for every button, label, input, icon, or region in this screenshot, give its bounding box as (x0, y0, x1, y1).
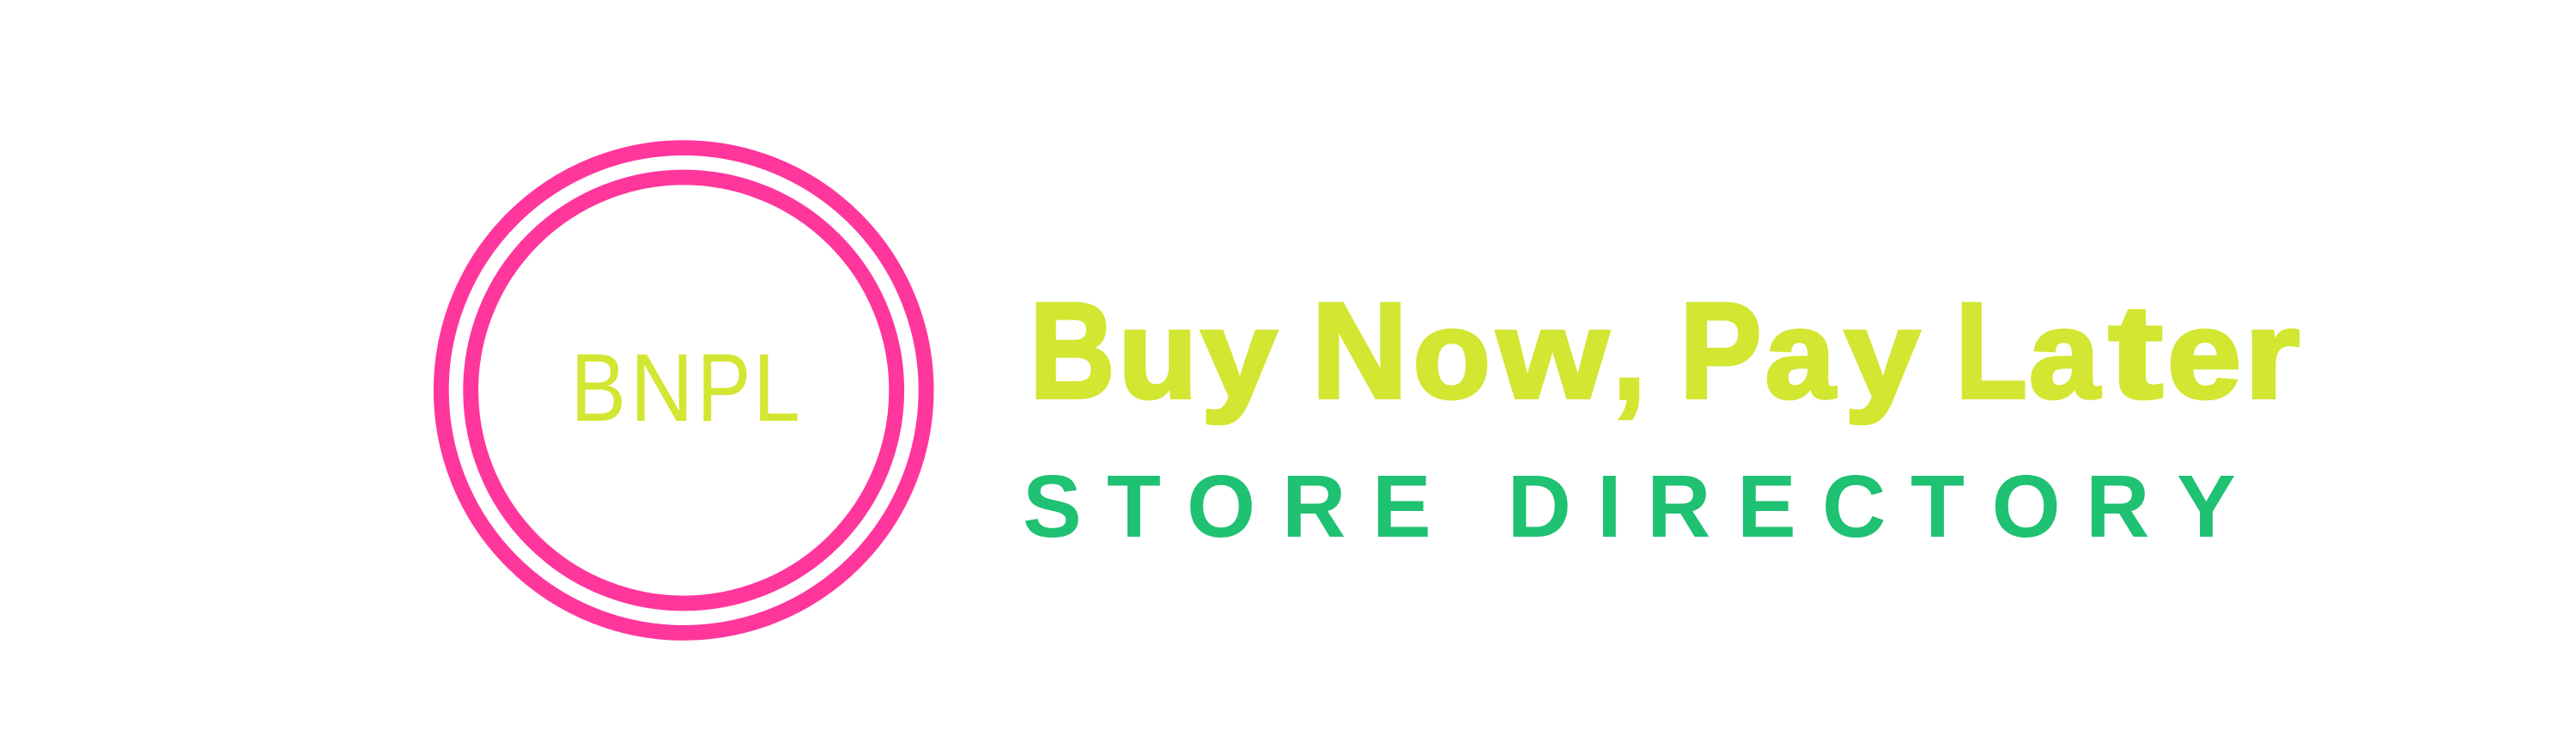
logo text: BNPL: B (570, 334, 626, 442)
inner ring (471, 177, 896, 603)
heading: Buy Now, Pay Later (1030, 274, 2300, 428)
logo text: BNPL: L (753, 335, 800, 441)
heading: Buy Now, Pay Later: a (1765, 285, 1837, 425)
heading: Buy Now, Pay Later: u (1118, 284, 1198, 424)
heading: Buy Now, Pay Later: e (2167, 284, 2241, 424)
heading: Buy Now, Pay Later: t (2108, 277, 2163, 426)
outer ring (441, 148, 927, 633)
heading: Buy Now, Pay Later: a (2029, 285, 2100, 425)
heading: Buy Now, Pay Later: w (1496, 285, 1609, 425)
heading: Buy Now, Pay Later: N (1311, 276, 1408, 427)
heading: Buy Now, Pay Later: L (1955, 276, 2027, 427)
logo text: BNPL: N (630, 334, 694, 441)
subheading: STORE DIRECTORY (1023, 457, 2236, 556)
logo text: BNPL (570, 333, 800, 442)
heading: Buy Now, Pay Later: B (1030, 274, 1115, 427)
heading: Buy Now, Pay Later: P (1680, 275, 1762, 428)
logo text: BNPL: P (697, 333, 750, 441)
subheading: STORE DIRECTORY: DIRECTORY (1508, 457, 2236, 556)
heading: Buy Now, Pay Later: o (1413, 285, 1491, 425)
subheading: STORE DIRECTORY: STORE (1023, 457, 1431, 556)
heading: Buy Now, Pay Later: y (1200, 285, 1277, 425)
logo: double ring badge (441, 148, 927, 633)
heading: Buy Now, Pay Later: r (2245, 284, 2300, 425)
heading: Buy Now, Pay Later: y (1844, 285, 1920, 425)
heading: Buy Now, Pay Later: , (1613, 283, 1646, 426)
